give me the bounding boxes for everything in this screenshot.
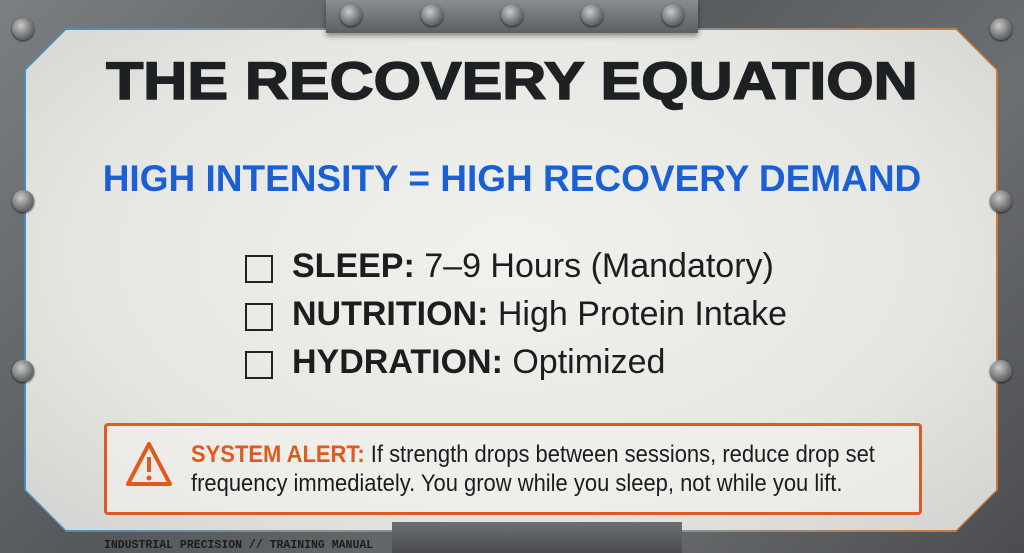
footer text: INDUSTRIAL PRECISION // TRAINING MANUAL	[104, 539, 373, 552]
item: nutrition: NUTRITION: High Protein Intake	[292, 295, 787, 333]
alert text	[191, 441, 875, 497]
item: sleep: SLEEP: 7–9 Hours (Mandatory)	[292, 247, 774, 285]
checklist	[245, 247, 787, 381]
alert text: SYSTEM ALERT: If strength drops between sessions, reduce drop set	[191, 441, 875, 468]
top metal plate	[326, 0, 698, 33]
alert text: frequency immediately. You grow while you sleep, not while you lift.	[191, 470, 842, 497]
icon: warning triangle	[126, 442, 172, 486]
bottom metal plate	[392, 522, 682, 553]
callout: system alert	[104, 423, 922, 515]
subtitle: HIGH INTENSITY = HIGH RECOVERY DEMAND	[103, 158, 921, 199]
item: hydration: HYDRATION: Optimized	[292, 343, 665, 381]
title: THE RECOVERY EQUATION	[106, 52, 918, 111]
